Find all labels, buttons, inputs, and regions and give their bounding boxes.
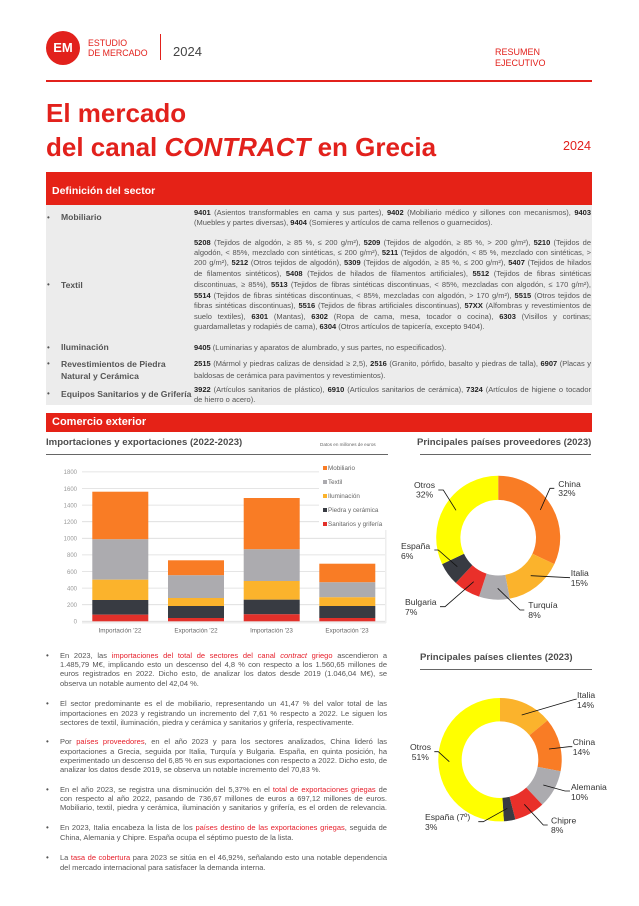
bullet: furniture: sectores de textil, iluminación, piedra y cerámica y sanitarios y grifería, respectivamente.: [60, 718, 354, 727]
bullet: suppliers: analizar los datos desde 2019, se observa un notable incremento del 70,83 %.: [60, 765, 321, 774]
x axis labels: Exportación '22: [174, 628, 218, 634]
bullet: suppliers: exportaciones a Grecia, seguida por Italia, Turquía y Bulgaria. España, en quinta posición, ha: [60, 747, 387, 756]
sector codes text: 2515 (Mármol y piedras calizas de densidad ≥ 2,5), 2516 (Granito, pórfido, basalto y piedras de talla), 6907 (Placas y: [194, 359, 591, 368]
donut chart: clients: España (7º): [425, 812, 470, 822]
chart unit note: Datos en millones de euros: [320, 442, 376, 447]
sector codes text: 200 g/m²), 5212 (Otros tejidos de algodón), 5309 (Tejidos de algodón, ≥ 85 %, ≤ 200 g/m²), 5407 (Tejidos de hilados: [194, 258, 591, 267]
bullet: imports: •: [46, 651, 49, 660]
supplier rule: [420, 454, 591, 455]
chart rule: [46, 454, 388, 455]
bar chart: 600: [67, 570, 78, 576]
bar chart: 1200: [64, 520, 78, 526]
report type label: RESUMEN: [495, 47, 540, 57]
bullet: coverage: del mercado internacional para satisfacer la demanda interna.: [60, 863, 266, 872]
title: del canal CONTRACT en Grecia: [46, 132, 436, 162]
bullet: imports: euros registrados en 2022. Dicho esto, de analizar los datos desde 2019 (1.046,04 M€), se: [60, 669, 387, 678]
header year: 2024: [173, 44, 202, 59]
donut chart: suppliers: Turquía: [528, 600, 558, 610]
donut chart: clients: 14%: [573, 747, 590, 757]
bar: Exportación '22: [168, 560, 224, 621]
sector codes text: de filamentos sintéticos), 5408 (Tejidos de hilados de filamentos artificiales), 5512 (Tejidos de fibras sintéticas: [194, 268, 591, 278]
summary text bullets: [46, 651, 388, 872]
bullet: imports: 1.485,79 M€, implicando esto un descenso del 4,8 % con respecto a los 1.560,65 millones de: [60, 660, 387, 669]
bar: Importación '22: [92, 492, 148, 621]
logo text: [88, 38, 148, 58]
bullet: coverage: [46, 853, 388, 872]
title year: 2024: [563, 139, 591, 153]
sector codes text: discontinuas, ≥ 85%), 5513 (Tejidos de fibras sintéticas discontinuas, < 85%, mezcladas con algodón, ≤ 170 g/m²),: [194, 280, 591, 289]
sector labels: •: [47, 359, 50, 368]
sector codes text: 9405 (Luminarias y aparatos de alumbrado, y sus partes, no especificados).: [194, 342, 446, 352]
donut chart: suppliers: Bulgaria: [405, 597, 437, 607]
sector labels: •: [47, 389, 50, 398]
bullet: coverage: •: [46, 853, 49, 862]
sector codes text: suelo textiles), 6301 (Mantas), 6302 (Ropa de cama, mesa, tocador o cocina), 6303 (Visillos y cortinas;: [194, 312, 591, 320]
bullet: coverage: La tasa de cobertura para 2023 se sitúa en el 46,92%, señalando esto una notable dependencia: [60, 853, 387, 862]
donut chart: suppliers: 7%: [405, 607, 418, 617]
donut chart: suppliers: 32%: [558, 488, 576, 498]
heading: Comercio exterior: Comercio exterior: [52, 416, 146, 428]
sector labels: Textil: [61, 280, 83, 290]
bullet: destinations: [46, 823, 387, 842]
client rule: [420, 669, 592, 670]
sector codes text: de hierro o acero).: [194, 394, 255, 404]
donut chart: clients: Italia: [577, 690, 595, 700]
heading: Definición del sector: Definición del sector: [52, 185, 155, 197]
donut chart: clients: China: [573, 737, 595, 747]
panel: sector definition: [46, 172, 592, 405]
donut chart: clients: 3%: [425, 822, 438, 832]
sector codes text: [194, 208, 591, 404]
donut chart: suppliers: 8%: [528, 610, 541, 620]
sector codes text: 3922 (Artículos sanitarios de plástico), 6910 (Artículos sanitarios de cerámica), 7324 (Artículos de higiene o tocador: [194, 385, 591, 394]
chart legend: Iluminación: [328, 493, 360, 500]
donut chart: suppliers: China: [558, 479, 581, 489]
bullet: furniture: •: [46, 699, 49, 708]
bullet: suppliers: [46, 737, 388, 774]
icon: EM circle: [46, 31, 80, 65]
bar chart: 0: [74, 620, 78, 626]
sector codes text: (Muebles y partes diversas), 9404 (Somieres y artículos de cama rellenos o guarnecidos).: [194, 218, 492, 227]
bar chart: 1400: [64, 503, 78, 509]
donut chart: clients: Alemania: [571, 782, 607, 792]
bullet: exports: con respecto al año 2022, pasando de 736,67 millones de euros a 697,12 millones de euros.: [60, 794, 387, 803]
bullet: furniture: El sector predominante es el de mobiliario, representando un 41,47 % del valor total de las: [60, 699, 387, 708]
bullet: exports: Mobiliario, textil, piedra y cerámica, iluminación y sanitarios y grifería, es el orden de relevancia.: [60, 803, 387, 812]
x axis labels: Exportación '23: [325, 628, 369, 634]
sector labels: Natural y Cerámica: [61, 370, 139, 380]
heading: supplier countries: Principales países proveedores (2023): [417, 437, 591, 448]
bullet: suppliers: Por países proveedores, en el año 2023 y para los sectores analizados, China lideró las: [60, 737, 387, 746]
bullet: destinations: •: [46, 823, 49, 832]
heading: client countries: Principales países clientes (2023): [420, 652, 573, 663]
heading: Definición del sector: [46, 172, 592, 205]
title: El mercado: [46, 98, 186, 128]
sector labels: •: [47, 280, 50, 289]
donut chart: clients: 8%: [551, 825, 564, 835]
bullet: furniture: importaciones en 2023 y registrando un incremento del 7,61 % respecto a 2022. Le siguen los: [60, 709, 387, 718]
logo text: DE MERCADO: [88, 48, 148, 58]
chart legend: Sanitarios y grifería: [328, 521, 383, 528]
donut chart: clients: [410, 690, 607, 835]
header rule: [46, 80, 592, 82]
bullet: suppliers: •: [46, 737, 49, 746]
bullet: furniture: [46, 699, 387, 727]
bar chart: 800: [67, 553, 78, 559]
donut chart: clients: Chipre: [551, 815, 577, 825]
bullet: imports: observa un notable aumento del 42,04 %.: [60, 679, 199, 688]
bar: Importación '23: [244, 498, 300, 621]
bar chart: 1000: [64, 537, 78, 543]
donut chart: suppliers: 6%: [401, 551, 414, 561]
sector codes text: 5514 (Tejidos de fibras sintéticas discontinuas, < 85%, mezcladas con algodón, > 170 g/m²), 5515 (Otros tejidos de: [194, 290, 591, 300]
donut chart: suppliers: Italia: [571, 568, 589, 578]
chart legend: Piedra y cerámica: [328, 507, 379, 514]
donut chart: clients: 51%: [412, 752, 429, 762]
x axis labels: Importación '23: [250, 628, 293, 634]
icon: EM circle: EM: [53, 40, 73, 55]
sector codes text: guardamalletas y rodapiés de cama), 6304 (Otros artículos de tapicería, excepto 9404).: [194, 322, 485, 330]
bar chart: 400: [67, 586, 78, 592]
bar chart: 200: [67, 603, 78, 609]
donut chart: suppliers: 32%: [416, 489, 434, 499]
sector labels: •: [47, 213, 50, 222]
sector codes text: baldosas de cerámica para pavimentos y revestimientos).: [194, 370, 385, 380]
bullet: destinations: China, Alemania y Chipre. España ocupa el séptimo puesto de la lista.: [60, 833, 293, 842]
donut chart: suppliers: [401, 476, 589, 620]
chart legend: Mobiliario: [328, 465, 355, 472]
header divider: [160, 34, 161, 60]
report type label: [495, 47, 546, 68]
bar chart: 1600: [64, 487, 78, 493]
bullet: suppliers: experimentado un descenso del 6,85 % en sus exportaciones con respecto a 2022. Dicho esto, de: [60, 756, 387, 765]
bullet: imports: [46, 651, 388, 688]
donut chart: suppliers: 15%: [571, 578, 588, 588]
title: [46, 98, 436, 162]
x axis labels: [99, 628, 369, 634]
bullet: exports: •: [46, 785, 49, 794]
bar chart: [64, 465, 386, 634]
chart legend: [319, 461, 388, 530]
sector labels: Equipos Sanitarios y de Grifería: [61, 388, 191, 398]
bullet: exports: [46, 785, 387, 812]
bar chart: 1800: [64, 470, 78, 476]
heading: imports and exports chart: Importaciones y exportaciones (2022-2023): [46, 437, 242, 448]
sector labels: •: [47, 343, 50, 352]
sector codes text: 5208 (Tejidos de algodón, ≥ 85 %, ≤ 200 g/m²), 5209 (Tejidos de algodón, ≥ 85 %, > 200 g/m²), 5210 (Tejidos de: [194, 238, 591, 246]
sector labels: [47, 212, 192, 398]
sector codes text: algodón, < 85%, mezclado con sintéticas, ≤ 200 g/m²), 5211 (Tejidos de algodón, < 85 %, mezclado con sintéticas, >: [194, 248, 591, 256]
donut chart: clients: Otros: [410, 742, 431, 752]
bullet: imports: En 2023, las importaciones del total de sectores del canal contract griego ascendieron a: [60, 651, 387, 660]
donut chart: clients: 10%: [571, 792, 589, 802]
header logo: [46, 31, 148, 65]
donut chart: suppliers: España: [401, 541, 430, 551]
sector codes text: fibras sintéticas discontinuas), 5516 (Tejidos de fibras artificiales discontinuas), 57XX (Alfombras y revestimientos de: [194, 300, 591, 310]
donut chart: suppliers: Otros: [414, 480, 435, 490]
bullet: destinations: En 2023, Italia encabeza la lista de los países destino de las exportaciones griegas, seguida de: [60, 823, 387, 832]
bullet: exports: En el año 2023, se registra una disminución del 5,37% en el total de exportaciones griegas de: [60, 785, 387, 794]
chart legend: Textil: [328, 479, 342, 486]
sector codes text: 9401 (Asientos transformables en cama y sus partes), 9402 (Mobiliario médico y sillones con mecanismos), 9403: [194, 208, 591, 217]
report type label: EJECUTIVO: [495, 58, 546, 68]
sector labels: Iluminación: [61, 342, 109, 352]
sector labels: Mobiliario: [61, 212, 102, 222]
donut chart: clients: 14%: [577, 700, 595, 710]
sector labels: Revestimientos de Piedra: [61, 358, 166, 368]
logo text: ESTUDIO: [88, 38, 127, 48]
heading: Comercio exterior: [46, 413, 592, 432]
x axis labels: Importación '22: [99, 628, 142, 634]
bar: Exportación '23: [319, 564, 375, 621]
